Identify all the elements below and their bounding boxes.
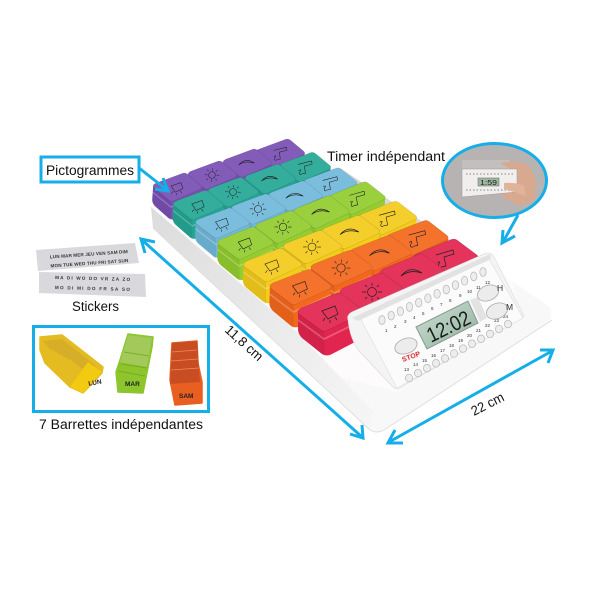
green bar MAR: MAR — [125, 381, 140, 388]
yellow bar LUN — [40, 335, 103, 393]
stop button: STOP — [401, 351, 422, 364]
callout: pictogrammes: Pictogrammes — [46, 163, 134, 178]
sticker: days FR and EN: LUN MAR MER JEU VEN SAM DIM — [50, 249, 128, 260]
LED row and hours 1 to 12: 5 — [422, 311, 425, 316]
pill row: blue — [194, 167, 358, 259]
LED row and hours 13 to 24: 20 — [467, 333, 473, 338]
timer — [348, 253, 524, 389]
LED row and hours 13 to 24: 14 — [413, 362, 419, 367]
LED row and hours 13 to 24: 18 — [449, 343, 455, 348]
photo: timer in hand — [442, 144, 546, 218]
pill row: purple — [151, 138, 306, 221]
sticker: days FR and EN — [36, 243, 139, 271]
LED row and hours 13 to 24: 16 — [431, 353, 437, 358]
LED row and hours 1 to 12: 11 — [476, 285, 481, 290]
sticker: days NL and DE — [39, 272, 146, 297]
sticker: days NL and DE: MA DI WO DO VR ZA ZO — [55, 275, 131, 282]
LED row and hours 1 to 12: 1 — [385, 328, 388, 333]
pill row: pink — [298, 239, 478, 356]
LED row and hours 13 to 24: 23 — [494, 318, 500, 323]
green bar MAR — [116, 334, 153, 393]
heading: timer indépendant: Timer indépendant — [327, 149, 445, 164]
label: 11,8 cm: 11,8 cm — [222, 322, 266, 364]
LED row and hours 1 to 12: 10 — [467, 289, 473, 294]
LED row and hours 13 to 24: 22 — [485, 323, 491, 328]
pill row: green — [217, 182, 386, 281]
arrow: depth dimension — [141, 239, 363, 438]
hour button — [475, 282, 503, 304]
LED row and hours 1 to 12: 6 — [431, 306, 434, 311]
LED row and hours 13 to 24: 24 — [503, 314, 509, 319]
label: barrettes: 7 Barrettes indépendantes — [39, 417, 203, 432]
LED row and hours 13 to 24: 21 — [476, 328, 482, 333]
LED row and hours 1 to 12: 8 — [449, 298, 452, 303]
label: 22 cm: 22 cm — [469, 389, 507, 419]
arrow: pictogrammes — [139, 168, 168, 191]
callout: pictogrammes — [41, 157, 139, 182]
tray — [151, 150, 552, 432]
LED row and hours 1 to 12: 9 — [459, 293, 462, 298]
sticker: days FR and EN: MON TUE WED THU FRI SAT SUN — [50, 258, 129, 268]
sticker: days NL and DE: MO DI MI DO FR SA SO — [55, 285, 130, 292]
LED row and hours 1 to 12 — [379, 268, 491, 333]
pill row: teal — [171, 151, 332, 240]
photo: timer in hand: 1:59 — [480, 180, 497, 187]
LED row and hours 13 to 24: 15 — [422, 358, 428, 363]
LED row and hours 13 to 24: 13 — [404, 367, 410, 372]
label: stickers: Stickers — [72, 299, 119, 314]
LED row and hours 1 to 12: 2 — [394, 324, 397, 329]
LCD screen: 12:02 — [423, 307, 475, 347]
arrow: width dimension — [388, 350, 553, 443]
orange bar SAM — [170, 341, 202, 405]
LED row and hours 13 to 24: 17 — [440, 348, 446, 353]
LED row and hours 1 to 12: 4 — [413, 315, 416, 320]
hour button: H — [497, 283, 503, 293]
pill row: orange — [268, 220, 449, 328]
orange bar SAM: SAM — [179, 393, 193, 400]
LED row and hours 1 to 12: 7 — [440, 302, 443, 307]
LED row and hours 1 to 12: 12 — [485, 280, 491, 285]
stop button — [393, 335, 422, 364]
arrow: timer — [502, 215, 518, 243]
minute button: M — [506, 302, 513, 312]
minute button — [484, 300, 513, 322]
LED row and hours 13 to 24 — [404, 314, 512, 382]
LED row and hours 13 to 24: 19 — [458, 338, 464, 343]
LED row and hours 1 to 12: 3 — [404, 319, 407, 324]
panel: barrettes — [34, 326, 208, 412]
yellow bar LUN: LUN — [88, 379, 103, 388]
pill row: yellow — [242, 201, 417, 304]
